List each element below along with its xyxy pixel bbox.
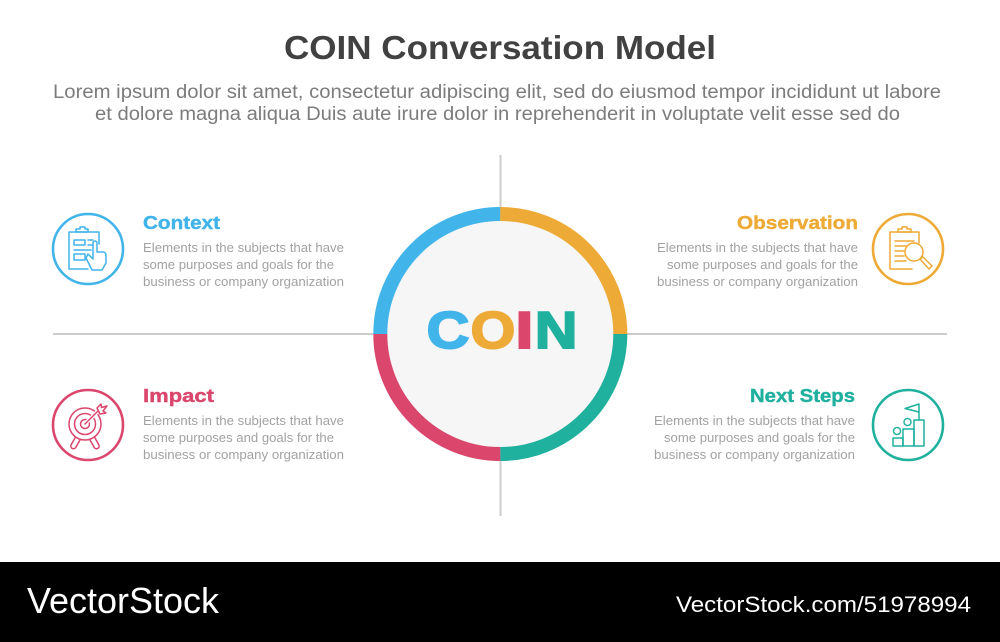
description: impact: business or company organization [143,447,344,462]
subtitle text block [53,82,941,125]
subtitle text block: Lorem ipsum dolor sit amet, consectetur adipiscing elit, sed do eiusmod tempor incididunt ut labore [53,82,941,103]
COIN wordmark: I [516,302,533,360]
footer image id: VectorStock.com/51978994 [676,592,971,617]
icon: clipboard with magnifier [873,214,943,284]
footer logo: VectorStock [27,580,220,621]
panel: observation [657,212,943,289]
description: next steps: business or company organization [654,447,855,462]
description: impact [143,413,344,462]
description: next steps: Elements in the subjects that have [654,413,855,428]
description: next steps: some purposes and goals for the [664,430,855,445]
ring segment: impact [380,334,500,454]
description: observation: Elements in the subjects that have [657,240,858,255]
description: context: some purposes and goals for the [143,257,334,272]
heading: next steps: Next Steps [750,385,855,406]
heading: context: Context [143,212,220,233]
heading: observation: Observation [737,212,858,233]
icon: clipboard with hand [53,214,123,284]
ring segment: next steps [500,334,620,454]
icon: target with arrow [53,390,123,460]
ring segment: context [380,214,500,334]
panel: next steps [654,385,943,462]
description: impact: some purposes and goals for the [143,430,334,445]
central COIN ring diagram [380,214,620,454]
description: next steps [654,413,855,462]
panel: impact [53,385,344,462]
panel: context [53,212,344,289]
title: COIN Conversation Model [284,29,716,66]
heading: impact: Impact [143,385,214,406]
icon: stairs with flag [873,390,943,460]
COIN wordmark [427,302,577,360]
description: context: business or company organization [143,274,344,289]
subtitle text block: et dolore magna aliqua Duis aute irure dolor in reprehenderit in voluptate velit esse sed do [95,104,900,125]
COIN wordmark: C [427,302,469,360]
description: observation [657,240,858,289]
description: context [143,240,344,289]
COIN wordmark: O [471,302,515,360]
description: context: Elements in the subjects that have [143,240,344,255]
description: observation: some purposes and goals for the [667,257,858,272]
footer bar [0,562,1000,642]
description: impact: Elements in the subjects that have [143,413,344,428]
description: observation: business or company organization [657,274,858,289]
ring segment: observation [500,214,620,334]
COIN wordmark: N [535,302,577,360]
